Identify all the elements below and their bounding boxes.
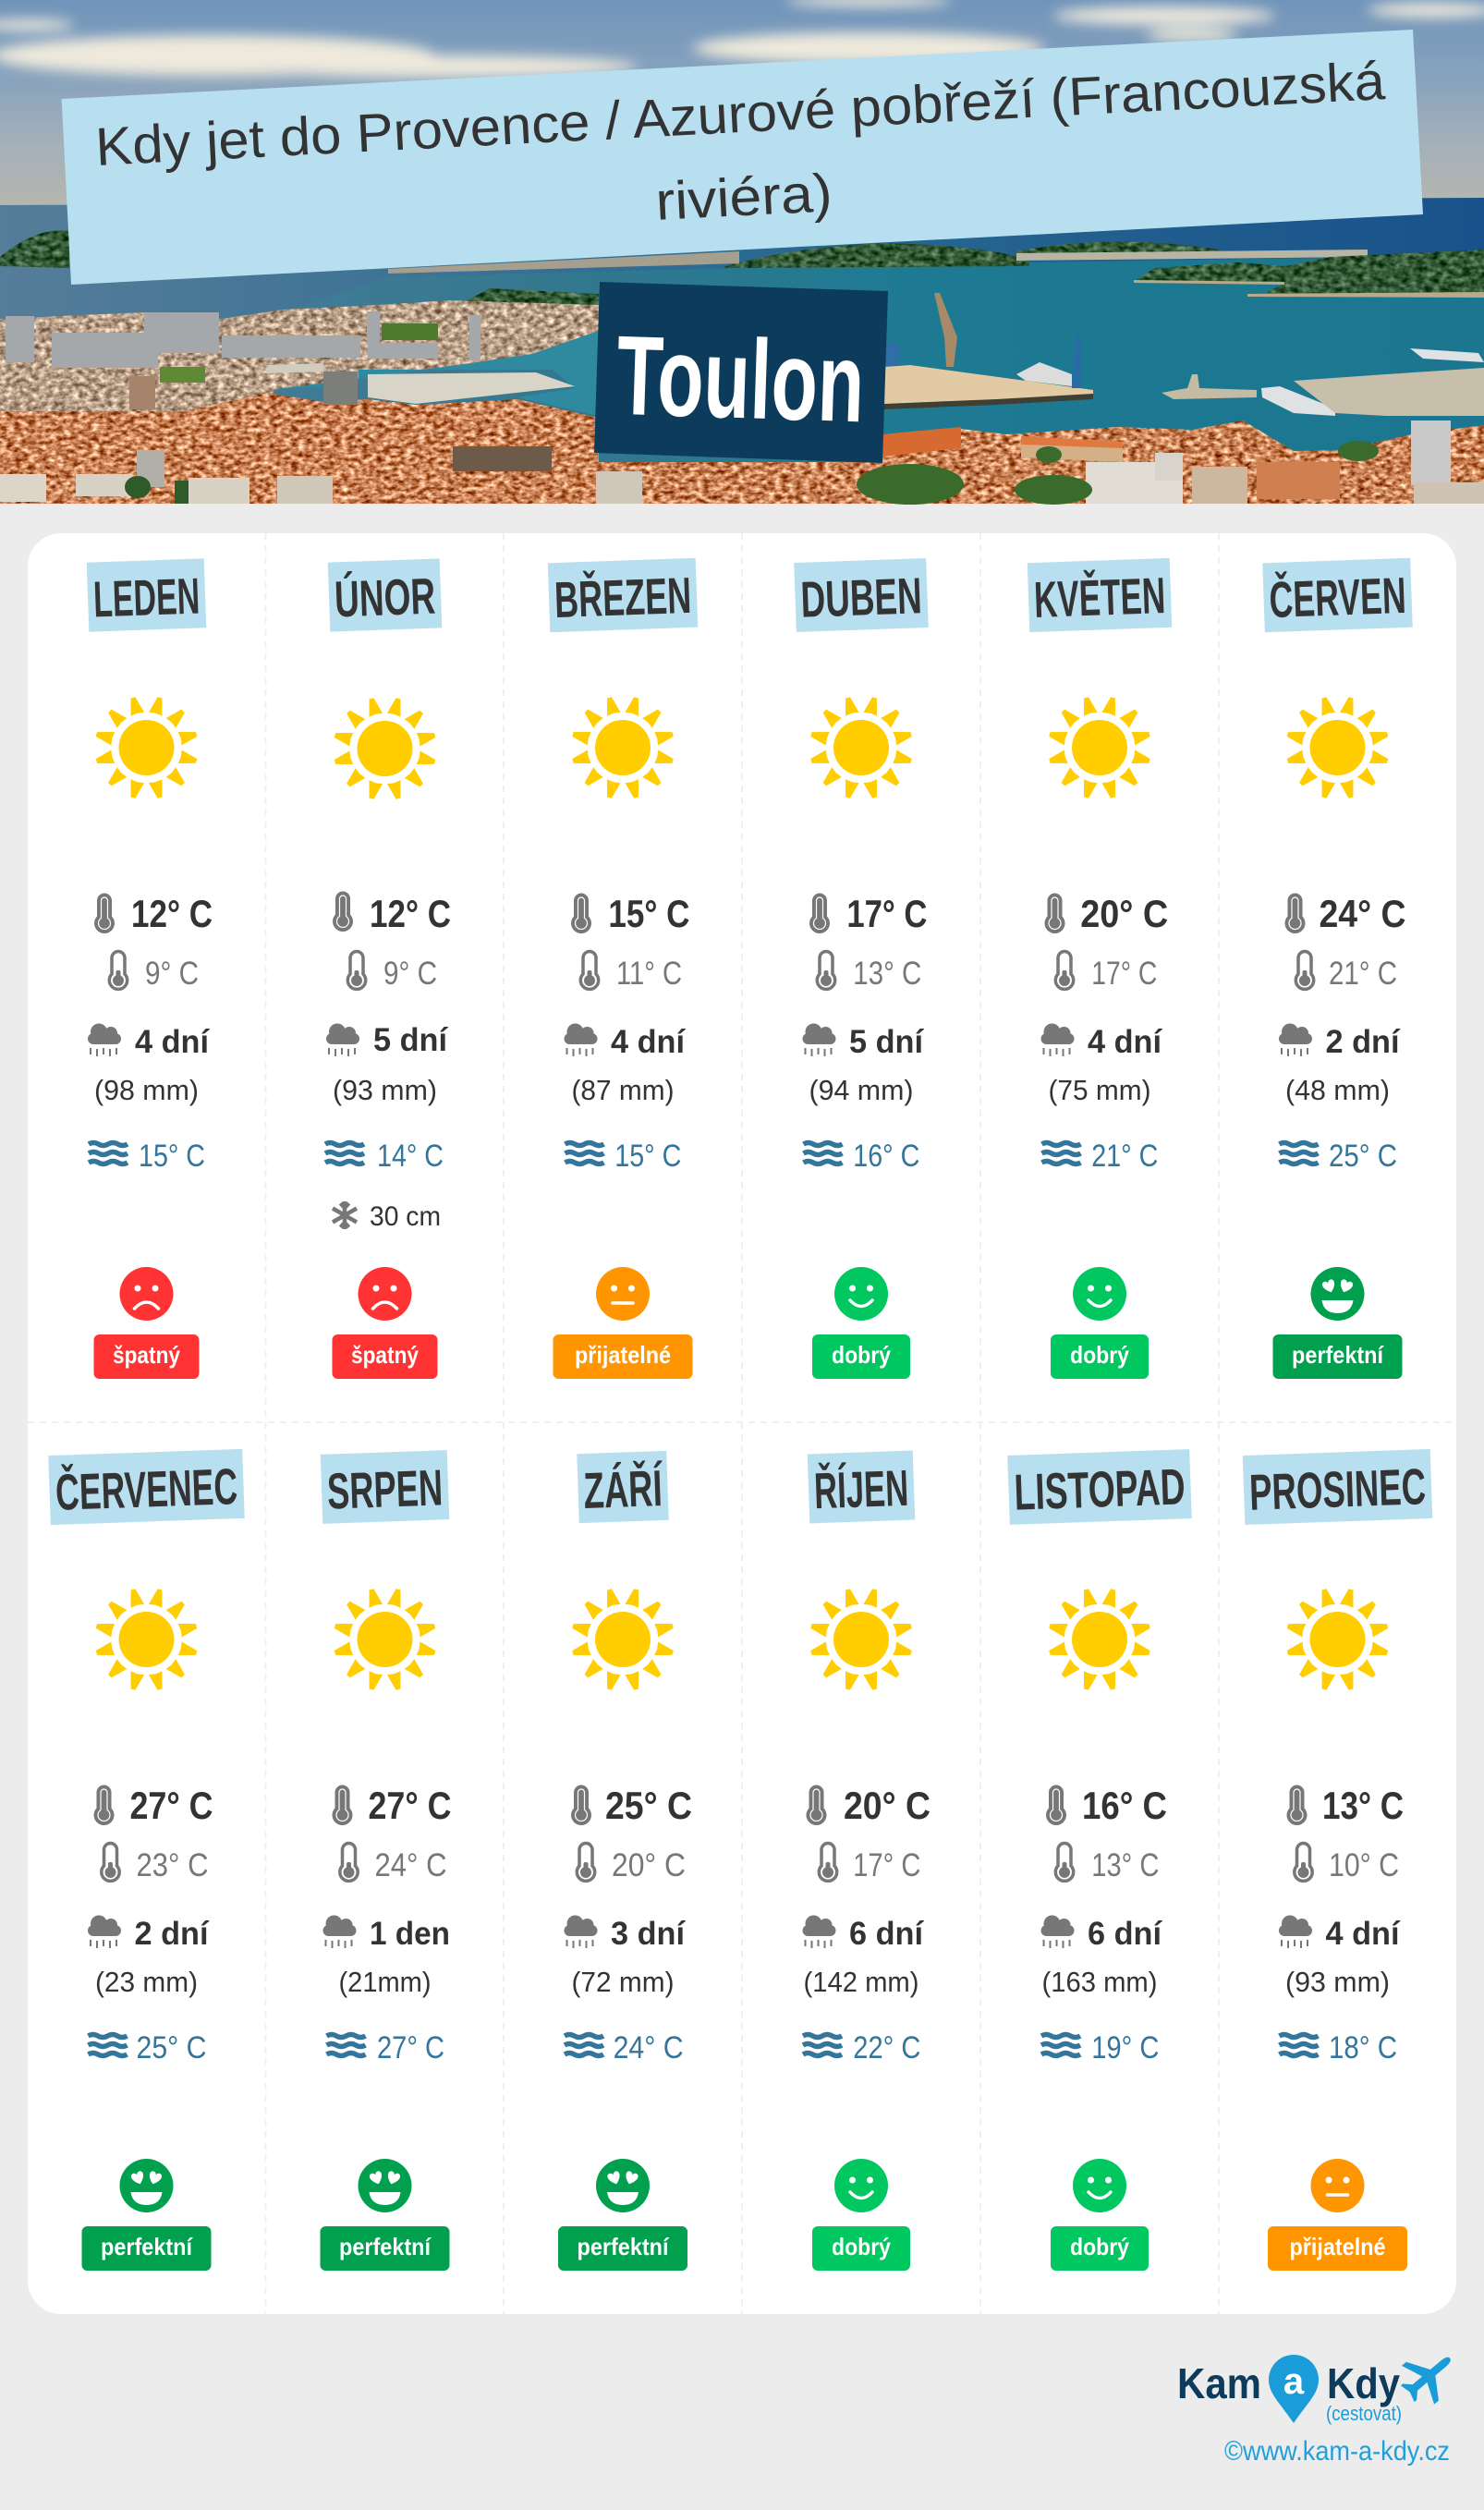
month label: DUBEN [800, 567, 923, 628]
month label: ČERVENEC [55, 1457, 238, 1521]
city buildings [0, 372, 1484, 505]
rating badge [1051, 2226, 1149, 2271]
high temperature [809, 892, 927, 935]
icon: plane [1392, 2339, 1466, 2413]
rain days [564, 1915, 686, 1952]
sea temperature: 24° C [614, 2030, 684, 2065]
rating face [1310, 1267, 1364, 1321]
rating badge: špatný [351, 1341, 419, 1369]
low temperature: 13° C [1091, 1847, 1159, 1883]
rating badge [812, 1334, 910, 1379]
icon: sun [94, 696, 199, 799]
sea temperature: 25° C [137, 2030, 207, 2065]
rating face [120, 2159, 174, 2212]
rainfall: (142 mm) [804, 1966, 918, 1998]
high temperature: 25° C [605, 1784, 692, 1827]
rating badge [1051, 1334, 1149, 1379]
sea temperature: 19° C [1091, 2030, 1159, 2065]
rating badge [320, 2226, 449, 2271]
rainfall: (94 mm) [809, 1074, 913, 1106]
icon: map pin: a [1283, 2361, 1305, 2402]
sea temperature [804, 1139, 919, 1174]
low temperature [817, 952, 921, 992]
rating face [1073, 2159, 1126, 2212]
low temperature [340, 1843, 447, 1883]
city name badge [594, 282, 888, 463]
rating badge [81, 2226, 211, 2271]
high temperature: 13° C [1322, 1784, 1404, 1827]
rain days: 4 dní [1325, 1916, 1401, 1952]
logo: Kam a Kdy: (cestovat) [1326, 2402, 1402, 2425]
rain days: 3 dní [611, 1916, 686, 1952]
low temperature: 17° C [1091, 956, 1157, 992]
rain days [1279, 1915, 1401, 1952]
high temperature [571, 892, 689, 935]
month label [577, 1451, 669, 1523]
high temperature: 27° C [368, 1784, 451, 1827]
rating badge [333, 1334, 438, 1379]
rating badge [812, 2226, 910, 2271]
rain days: 1 den [370, 1916, 450, 1952]
high temperature [94, 892, 213, 935]
rating badge [1268, 2226, 1407, 2271]
month label: ÚNOR [334, 567, 436, 628]
cell: Červen [1262, 558, 1413, 1379]
high temperature [1046, 1784, 1167, 1827]
rating badge [558, 2226, 687, 2271]
sea temperature [89, 1139, 205, 1174]
high temperature [94, 1784, 213, 1827]
rainfall: (98 mm) [94, 1074, 199, 1106]
low temperature [577, 1843, 686, 1883]
website credit: ©www.kam-a-kdy.cz [1224, 2436, 1450, 2467]
cell: Červenec [48, 1449, 245, 2271]
snow depth: 30 cm [370, 1201, 441, 1232]
rainfall: (93 mm) [333, 1074, 437, 1106]
sea temperature: 14° C [377, 1139, 444, 1174]
low temperature: 11° C [616, 956, 682, 992]
rainfall: (93 mm) [1285, 1966, 1390, 1998]
rain days: 6 dní [1088, 1916, 1162, 1952]
title banner [62, 30, 1423, 285]
sea temperature [803, 2030, 920, 2065]
rain days [323, 1915, 450, 1952]
icon: sun [809, 696, 913, 799]
rain days [1040, 1024, 1162, 1060]
rainfall: (21mm) [338, 1966, 431, 1998]
rain days: 5 dní [849, 1024, 924, 1060]
rating face [596, 2159, 650, 2212]
rainfall: (163 mm) [1042, 1966, 1157, 1998]
month label [1262, 558, 1413, 632]
rain days: 4 dní [1088, 1024, 1162, 1060]
sea temperature: 16° C [853, 1139, 919, 1174]
rating badge: přijatelné [1290, 2233, 1386, 2260]
rain days [88, 1915, 210, 1952]
low temperature [109, 952, 199, 992]
snow depth [333, 1201, 441, 1232]
month label [548, 558, 698, 632]
month label [321, 1450, 449, 1524]
low temperature: 13° C [853, 956, 921, 992]
title text: riviéra) [654, 163, 833, 232]
cell: Říjen [802, 1451, 931, 2271]
rain days [802, 1915, 924, 1952]
month label: LEDEN [92, 567, 201, 628]
cell: Listopad [1007, 1449, 1192, 2271]
rating badge: dobrý [1070, 2233, 1129, 2260]
rainfall: (23 mm) [95, 1966, 198, 1998]
high temperature: 24° C [1320, 892, 1406, 935]
sea temperature [1042, 1139, 1158, 1174]
rating badge: špatný [113, 1341, 180, 1369]
month label [808, 1451, 915, 1523]
month label [48, 1449, 245, 1525]
low temperature [1055, 1843, 1159, 1883]
rating face [120, 1267, 174, 1321]
cell: Leden [87, 558, 213, 1379]
high temperature [1284, 892, 1406, 935]
icon: sun [1285, 696, 1390, 799]
low temperature [1295, 952, 1397, 992]
rain days [88, 1024, 210, 1060]
month label [1007, 1449, 1192, 1525]
rating badge: perfektní [577, 2233, 669, 2260]
sea temperature [325, 1139, 444, 1174]
rating badge [553, 1334, 693, 1379]
rainfall: (72 mm) [571, 1966, 675, 1998]
icon: sun [94, 1588, 199, 1691]
icon: map pin [1269, 2355, 1319, 2423]
cell: Září [558, 1451, 692, 2271]
high temperature [333, 891, 451, 935]
sea temperature: 25° C [1329, 1139, 1397, 1174]
rating badge: přijatelné [575, 1341, 671, 1369]
sea temperature [1279, 1139, 1397, 1174]
month label [328, 558, 442, 632]
sea temperature: 22° C [853, 2030, 920, 2065]
cell: Duben [794, 558, 929, 1379]
sea temperature: 15° C [139, 1139, 205, 1174]
logo: Kam a Kdy: Kdy [1327, 2359, 1400, 2407]
low temperature: 24° C [375, 1847, 447, 1883]
rating badge: perfektní [339, 2233, 432, 2260]
rainfall: (87 mm) [571, 1074, 675, 1106]
cell: Květen [1028, 558, 1172, 1379]
rating face [596, 1267, 650, 1321]
high temperature [333, 1784, 451, 1827]
low temperature: 20° C [612, 1847, 686, 1883]
icon: sun [571, 696, 675, 799]
low temperature [1055, 952, 1157, 992]
rating badge [94, 1334, 200, 1379]
high temperature: 20° C [1080, 892, 1168, 935]
sea temperature [1279, 2030, 1397, 2065]
rating badge: perfektní [1292, 1341, 1384, 1369]
low temperature: 9° C [145, 956, 199, 992]
icon: sun [1048, 696, 1151, 799]
rating badge: dobrý [1070, 1341, 1129, 1369]
high temperature: 17° C [846, 892, 927, 935]
sea temperature [566, 1139, 681, 1174]
port docks [934, 293, 957, 367]
hero photo: Toulon bay [0, 0, 1484, 505]
month label: BŘEZEN [553, 567, 692, 628]
icon: sun [333, 697, 437, 800]
month label [794, 558, 929, 632]
low temperature: 17° C [853, 1847, 920, 1883]
low temperature [102, 1843, 209, 1883]
rain days: 2 dní [1325, 1024, 1401, 1060]
low temperature [1295, 1843, 1399, 1883]
rain days: 6 dní [849, 1916, 924, 1952]
marina water [277, 331, 599, 416]
panel: monthly climate card [28, 533, 1456, 2314]
low temperature [819, 1843, 920, 1883]
icon: sun [1048, 1588, 1151, 1691]
high temperature: 27° C [129, 1784, 213, 1827]
rating badge: dobrý [832, 2233, 891, 2260]
sea temperature [565, 2030, 684, 2065]
sea temperature [327, 2030, 444, 2065]
rating face [1073, 1267, 1126, 1321]
cell: Únor [325, 558, 451, 1379]
high temperature [1286, 1784, 1404, 1827]
icon: sun [809, 1588, 913, 1691]
rating face [834, 2159, 888, 2212]
month label: KVĚTEN [1033, 567, 1166, 628]
month label: ZÁŘÍ [583, 1459, 664, 1519]
title text: Kdy jet do Provence / Azurové pobřeží (Francouzská [94, 51, 1387, 177]
month label: ŘÍJEN [813, 1459, 909, 1519]
high temperature: 20° C [844, 1784, 931, 1827]
rating face [834, 1267, 888, 1321]
month label [1243, 1449, 1432, 1525]
cell: Srpen [320, 1450, 451, 2271]
rain days [802, 1024, 924, 1060]
low temperature [580, 952, 682, 992]
icon: sun [571, 1588, 675, 1691]
rain days: 5 dní [373, 1022, 448, 1058]
high temperature: 15° C [608, 892, 689, 935]
rain days [564, 1024, 686, 1060]
low temperature [347, 952, 437, 992]
high temperature: 12° C [370, 892, 451, 935]
city grey blocks [0, 300, 599, 416]
month label: LISTOPAD [1014, 1457, 1186, 1521]
hills [0, 230, 69, 268]
rating face [1310, 2159, 1364, 2212]
low temperature: 23° C [137, 1847, 209, 1883]
rain days: 4 dní [135, 1024, 210, 1060]
high temperature [1044, 892, 1168, 935]
rainfall: (48 mm) [1285, 1074, 1390, 1106]
month label: SRPEN [326, 1458, 444, 1520]
low temperature: 9° C [383, 956, 437, 992]
sea temperature: 21° C [1091, 1139, 1158, 1174]
logo: Kam a Kdy [1177, 2339, 1466, 2425]
icon: sun [1285, 1588, 1390, 1691]
high temperature [806, 1784, 931, 1827]
month label: ČERVEN [1269, 567, 1407, 628]
rating face [359, 2159, 412, 2212]
terracotta roofs [0, 393, 1484, 504]
high temperature: 12° C [131, 892, 213, 935]
rain days: 4 dní [611, 1024, 686, 1060]
sea temperature [1041, 2030, 1159, 2065]
high temperature: 16° C [1082, 1784, 1167, 1827]
high temperature [571, 1784, 692, 1827]
rain days: 2 dní [135, 1916, 210, 1952]
sea temperature: 15° C [614, 1139, 681, 1174]
cell: Prosinec [1243, 1449, 1432, 2271]
month label [87, 558, 206, 632]
low temperature: 21° C [1329, 956, 1397, 992]
low temperature: 10° C [1329, 1847, 1399, 1883]
logo: Kam a Kdy: Kam [1177, 2359, 1261, 2407]
sea temperature: 18° C [1329, 2030, 1397, 2065]
rain days [1040, 1915, 1162, 1952]
month label [1028, 558, 1172, 632]
city name badge: Toulon [614, 312, 866, 445]
rating face [359, 1267, 412, 1321]
cell: Březen [548, 558, 698, 1379]
rating badge: dobrý [832, 1341, 891, 1369]
sea temperature: 27° C [377, 2030, 444, 2065]
icon: sun [333, 1588, 437, 1691]
rating badge: perfektní [101, 2233, 193, 2260]
sea temperature [89, 2030, 207, 2065]
title text [94, 51, 1387, 232]
rainfall: (75 mm) [1048, 1074, 1151, 1106]
rain days [1279, 1024, 1401, 1060]
rating badge [1273, 1334, 1403, 1379]
rain days [326, 1022, 448, 1058]
